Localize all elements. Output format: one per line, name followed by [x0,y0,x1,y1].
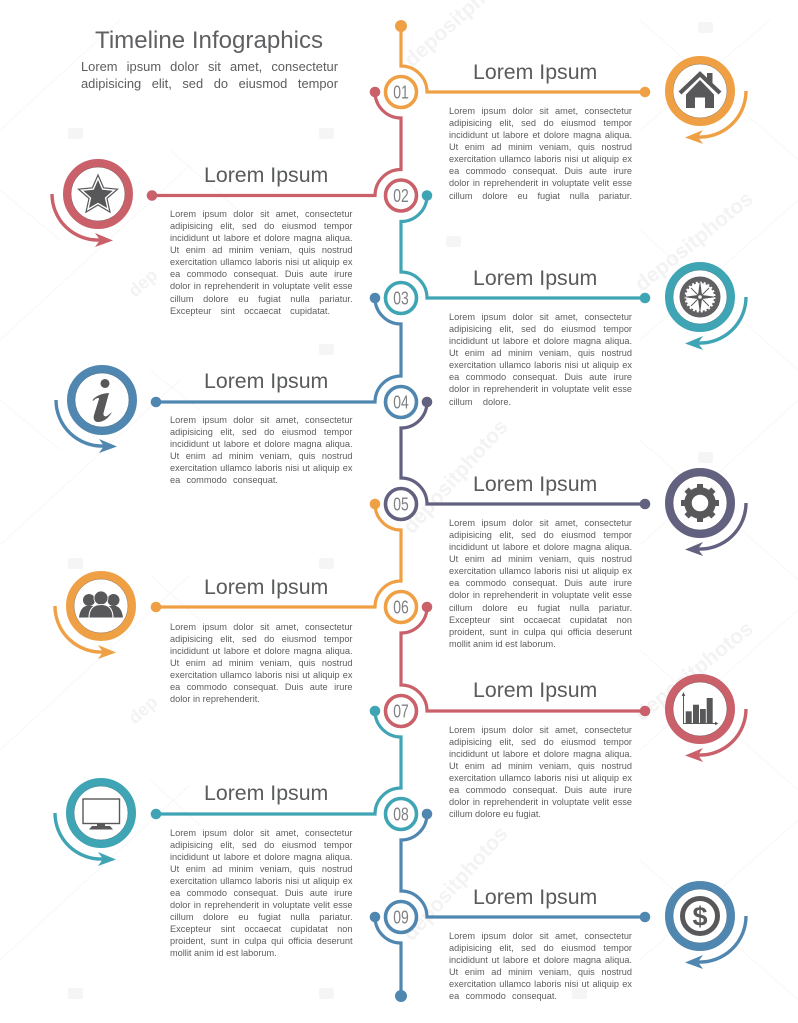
step numbers: 08 [393,804,409,824]
text block: step 07: dolor in reprehenderit in voluptate velit esse [449,797,632,807]
text block: step 04: adipisicing elit, sed do eiusmod tempor [170,427,352,437]
text block: step 05: proident, sunt in culpa qui officia deserunt [449,627,632,637]
text block: step 06: Ut enim ad minim veniam, quis nostrud [170,658,352,668]
text block: step 05: Lorem ipsum dolor sit amet, consectetur [449,518,632,528]
text block: step 04: Ut enim ad minim veniam, quis nostrud [170,451,352,461]
text block: step 05: Excepteur sint occaecat cupidatat non [449,615,632,625]
text block: step 02: ea commodo consequat. Duis aute irure [170,269,352,279]
text block: step 02: cillum dolore eu fugiat nulla pariatur. [170,294,352,304]
step 02 connector [147,87,416,211]
text block: step 08: dolor in reprehenderit in voluptate velit esse [170,900,352,910]
text block: step 02: Lorem ipsum dolor sit amet, consectetur [170,209,352,219]
text block: step 06: exercitation ullamco laboris nisi ut aliquip ex [170,670,352,680]
subtitle [81,59,338,91]
step 04 connector [151,293,416,418]
text block: step 05 [449,518,632,649]
heading: step 06: Lorem Ipsum [204,575,328,599]
text block: step 02: Excepteur sint occaecat cupidatat. [170,306,330,316]
heading: step 03: Lorem Ipsum [473,266,597,290]
text block: step 04: ea commodo consequat. [170,475,278,485]
text block: step 03: dolor in reprehenderit in voluptate velit esse [449,384,632,394]
text block: step 02: Ut enim ad minim veniam, quis nostrud [170,245,352,255]
text block: step 01: Lorem ipsum dolor sit amet, consectetur [449,106,632,116]
text block: step 07: exercitation ullamco laboris nisi ut aliquip ex [449,773,632,783]
text block: step 04 [170,415,352,485]
icon: info badge [56,369,133,453]
step numbers: 01 [393,82,409,102]
heading: step 07: Lorem Ipsum [473,678,597,702]
text block: step 09: Ut enim ad minim veniam, quis nostrud [449,967,632,977]
text block: step 08: adipisicing elit, sed do eiusmod tempor [170,840,352,850]
step 08 connector [151,706,416,830]
text block: step 05: cillum dolore eu fugiat nulla pariatur. [449,603,632,613]
text block: step 08: incididunt ut labore et dolore magna aliqua. [170,852,352,862]
text block: step 05: ea commodo consequat. Duis aute irure [449,578,632,588]
subtitle: Lorem ipsum dolor sit amet, consectetur [81,59,338,74]
text block: step 09: adipisicing elit, sed do eiusmod tempor [449,943,632,953]
text block: step 08: mollit anim id est laborum. [170,948,277,958]
title: Timeline Infographics [95,27,323,54]
icon: bar chart badge [669,678,746,762]
text block: step 09: exercitation ullamco laboris nisi ut aliquip ex [449,979,632,989]
text block: step 08: cillum dolore eu fugiat nulla pariatur. [170,912,352,922]
text block: step 07: cillum dolore eu fugiat. [449,809,541,819]
text block: step 05: exercitation ullamco laboris nisi ut aliquip ex [449,566,632,576]
text block: step 01: cillum dolore eu fugiat nulla pariatur. [449,191,632,201]
text block: step 08: ea commodo consequat. Duis aute irure [170,888,352,898]
text block: step 08: Excepteur sint occaecat cupidatat non [170,924,352,934]
text block: step 01: Ut enim ad minim veniam, quis nostrud [449,142,632,152]
icon: compass badge [669,266,746,350]
text block: step 03: exercitation ullamco laboris nisi ut aliquip ex [449,360,632,370]
text block: step 01: exercitation ullamco laboris nisi ut aliquip ex [449,154,632,164]
text block: step 09: incididunt ut labore et dolore magna aliqua. [449,955,632,965]
step 01 connector [386,20,650,108]
text block: step 01 [449,106,632,201]
heading: step 05: Lorem Ipsum [473,472,597,496]
subtitle: adipisicing elit, sed do eiusmod tempor [81,76,338,91]
text block: step 02: adipisicing elit, sed do eiusmod tempor [170,221,352,231]
step 09 connector [370,809,650,1002]
heading: step 09: Lorem Ipsum [473,885,597,909]
text block: step 07: incididunt ut labore et dolore magna aliqua. [449,749,632,759]
text block: step 05: mollit anim id est laborum. [449,639,556,649]
step 07 connector [386,602,650,726]
icon: home badge [669,60,746,144]
text block: step 02: dolor in reprehenderit in voluptate velit esse [170,281,352,291]
text block: step 05: dolor in reprehenderit in voluptate velit esse [449,590,632,600]
text block: step 06: Lorem ipsum dolor sit amet, consectetur [170,622,352,632]
watermark background: depositphotos [631,187,758,296]
text block: step 06 [170,622,352,704]
text block: step 05: adipisicing elit, sed do eiusmod tempor [449,530,632,540]
text block: step 08: exercitation ullamco laboris nisi ut aliquip ex [170,876,352,886]
text block: step 06: incididunt ut labore et dolore magna aliqua. [170,646,352,656]
text block: step 07: Lorem ipsum dolor sit amet, consectetur [449,724,632,734]
text block: step 02: exercitation ullamco laboris nisi ut aliquip ex [170,257,352,267]
step numbers [393,82,409,928]
text block: step 03: Ut enim ad minim veniam, quis nostrud [449,348,632,358]
text block: step 07 [449,724,632,819]
heading: step 04: Lorem Ipsum [204,369,328,393]
icon: monitor badge [55,782,132,866]
text block: step 08 [170,828,352,958]
text block: step 08: proident, sunt in culpa qui officia deserunt [170,936,352,946]
heading: step 01: Lorem Ipsum [473,60,597,84]
text block: step 04: incididunt ut labore et dolore magna aliqua. [170,439,352,449]
text block: step 06: ea commodo consequat. Duis aute irure [170,682,352,692]
text block: step 05: incididunt ut labore et dolore magna aliqua. [449,542,632,552]
step 03 connector [386,190,650,314]
text block: step 08: Ut enim ad minim veniam, quis nostrud [170,864,352,874]
text block: step 05: Ut enim ad minim veniam, quis nostrud [449,554,632,564]
heading: step 08: Lorem Ipsum [204,781,328,805]
text block: step 09: Lorem ipsum dolor sit amet, consectetur [449,931,632,941]
watermark background: depositphotos [631,617,758,726]
icon: dollar badge [669,885,746,969]
text block: step 06: adipisicing elit, sed do eiusmod tempor [170,634,352,644]
text block: step 02: incididunt ut labore et dolore magna aliqua. [170,233,352,243]
text block: step 08: Lorem ipsum dolor sit amet, consectetur [170,828,352,838]
text block: step 03: Lorem ipsum dolor sit amet, consectetur [449,312,632,322]
step numbers: 05 [393,494,409,514]
text block: step 02 [170,209,352,316]
step numbers: 06 [393,598,409,618]
watermark background: dep [124,692,161,728]
text block: step 07: ea commodo consequat. Duis aute irure [449,785,632,795]
text block: step 04: exercitation ullamco laboris nisi ut aliquip ex [170,463,352,473]
icon: people badge [55,575,132,659]
text block: step 01: adipisicing elit, sed do eiusmod tempor [449,118,632,128]
text block: step 01: ea commodo consequat. Duis aute irure [449,166,632,176]
text block: step 03: ea commodo consequat. Duis aute irure [449,372,632,382]
step numbers: 04 [393,392,409,412]
text block: step 07: Ut enim ad minim veniam, quis nostrud [449,761,632,771]
watermark background: depositphotos [399,822,513,945]
text block: step 07: adipisicing elit, sed do eiusmod tempor [449,737,632,747]
heading: step 02: Lorem Ipsum [204,163,328,187]
text block: step 03: incididunt ut labore et dolore magna aliqua. [449,336,632,346]
icon: dollar badge: $ [692,902,708,932]
step numbers: 03 [393,288,409,308]
text block: step 03: adipisicing elit, sed do eiusmod tempor [449,324,632,334]
text block: step 09 [449,931,632,1001]
watermark background: depositphotos [399,415,513,538]
text block: step 06: dolor in reprehenderit. [170,694,260,704]
text block: step 03 [449,312,632,407]
text block: step 01: incididunt ut labore et dolore magna aliqua. [449,130,632,140]
text block: step 04: Lorem ipsum dolor sit amet, consectetur [170,415,352,425]
step 06 connector [151,499,416,622]
text block: step 01: dolor in reprehenderit in voluptate velit esse [449,178,632,188]
icon: star badge [52,163,129,247]
text block: step 03: cillum dolore. [449,397,511,407]
icon: gear badge [669,472,746,556]
step 05 connector [386,397,650,520]
step numbers: 02 [393,186,409,206]
text block: step 09: ea commodo consequat. [449,991,557,1001]
watermark background: dep [124,265,161,301]
step numbers: 07 [393,702,409,722]
step numbers: 09 [393,908,409,928]
